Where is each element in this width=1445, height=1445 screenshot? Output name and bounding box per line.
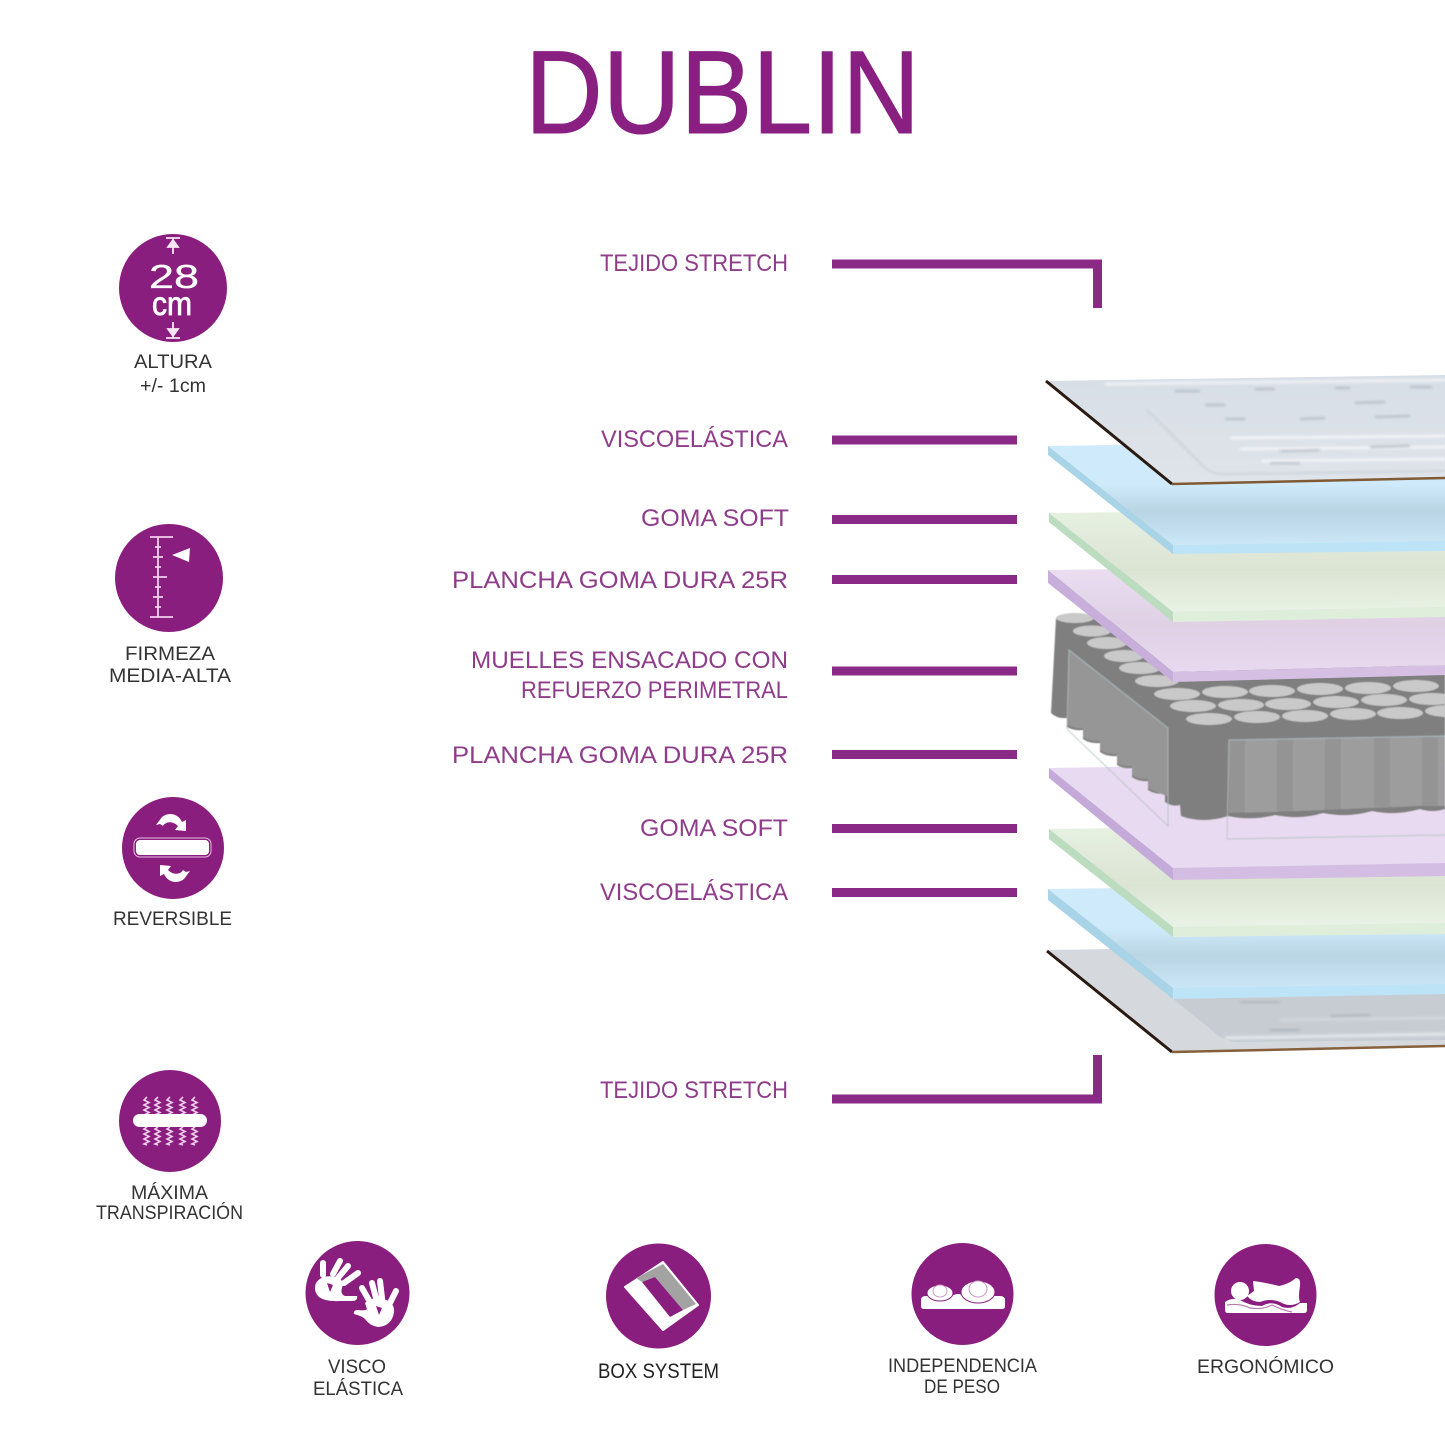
caption: ergonómico: ERGONÓMICO — [1197, 1356, 1334, 1378]
icon: box system — [606, 1244, 711, 1348]
icon: ergonómico — [1214, 1244, 1316, 1346]
glass perimeter panels — [1067, 650, 1445, 839]
label: muelles ensacado: MUELLES ENSACADO CON — [471, 647, 788, 674]
layer: bottom plancha goma dura — [1049, 762, 1445, 880]
caption: altura: ALTURA — [134, 352, 212, 373]
caption: independencia de peso: DE PESO — [924, 1377, 1000, 1398]
label: viscoelástica bottom: VISCOELÁSTICA — [600, 879, 788, 906]
label: muelles ensacado: REFUERZO PERIMETRAL — [521, 677, 788, 704]
caption: altura: +/- 1cm — [140, 376, 206, 397]
caption: firmeza: FIRMEZA — [125, 644, 215, 665]
caption: máxima transpiración: TRANSPIRACIÓN — [96, 1202, 243, 1224]
caption: firmeza — [109, 644, 231, 687]
caption: visco elástica: VISCO — [328, 1357, 386, 1378]
label: plancha goma dura top: PLANCHA GOMA DURA 25R — [452, 567, 788, 594]
leader line — [832, 575, 1017, 584]
layer: top tejido stretch — [1046, 375, 1445, 484]
icon: máxima transpiración — [119, 1070, 221, 1172]
layer: top goma soft — [1049, 508, 1445, 622]
bracket: tejido stretch top — [832, 264, 1098, 308]
leader line — [832, 888, 1017, 897]
icon: independencia de peso — [912, 1243, 1014, 1345]
label: goma soft top: GOMA SOFT — [641, 505, 789, 532]
label: muelles ensacado — [471, 647, 788, 704]
mattress cross-section — [1046, 375, 1445, 1052]
layer: top plancha goma dura — [1048, 565, 1445, 682]
caption: altura — [134, 352, 212, 397]
caption: visco elástica — [313, 1357, 403, 1400]
label: tejido stretch top: TEJIDO STRETCH — [600, 250, 788, 277]
leader line — [832, 436, 1017, 444]
caption: firmeza: MEDIA-ALTA — [109, 666, 231, 687]
bracket: tejido stretch bottom — [832, 1055, 1098, 1099]
leader line — [832, 750, 1017, 759]
layer: muelles ensacados — [1051, 613, 1445, 839]
label: viscoelástica top: VISCOELÁSTICA — [601, 426, 788, 453]
caption: independencia de peso: INDEPENDENCIA — [888, 1356, 1037, 1377]
caption: máxima transpiración — [96, 1183, 243, 1224]
layer: top viscoelástica — [1048, 440, 1445, 554]
title: DUBLIN — [525, 27, 920, 159]
icon: altura 28 cm — [119, 234, 227, 342]
icon: visco elástica — [306, 1241, 410, 1345]
leader line — [832, 666, 1017, 676]
caption: independencia de peso — [888, 1356, 1037, 1398]
icon: altura 28 cm: 28 — [149, 258, 199, 295]
caption: reversible: REVERSIBLE — [113, 909, 232, 930]
layer: bottom tejido stretch — [1047, 944, 1445, 1052]
label: goma soft bottom: GOMA SOFT — [640, 815, 788, 842]
caption: máxima transpiración: MÁXIMA — [131, 1183, 208, 1204]
layer: bottom goma soft — [1049, 824, 1445, 937]
spring tops — [1056, 613, 1445, 725]
leader line — [832, 515, 1017, 524]
icon: firmeza — [115, 524, 223, 632]
layer: bottom viscoelástica — [1048, 884, 1445, 999]
label: tejido stretch bottom: TEJIDO STRETCH — [600, 1077, 788, 1104]
leader line — [832, 824, 1017, 833]
icon: altura 28 cm: cm — [152, 285, 192, 322]
label: plancha goma dura bottom: PLANCHA GOMA DURA 25R — [452, 742, 788, 769]
caption: visco elástica: ELÁSTICA — [313, 1379, 403, 1400]
caption: box system: BOX SYSTEM — [598, 1360, 719, 1383]
icon: reversible — [122, 797, 224, 899]
